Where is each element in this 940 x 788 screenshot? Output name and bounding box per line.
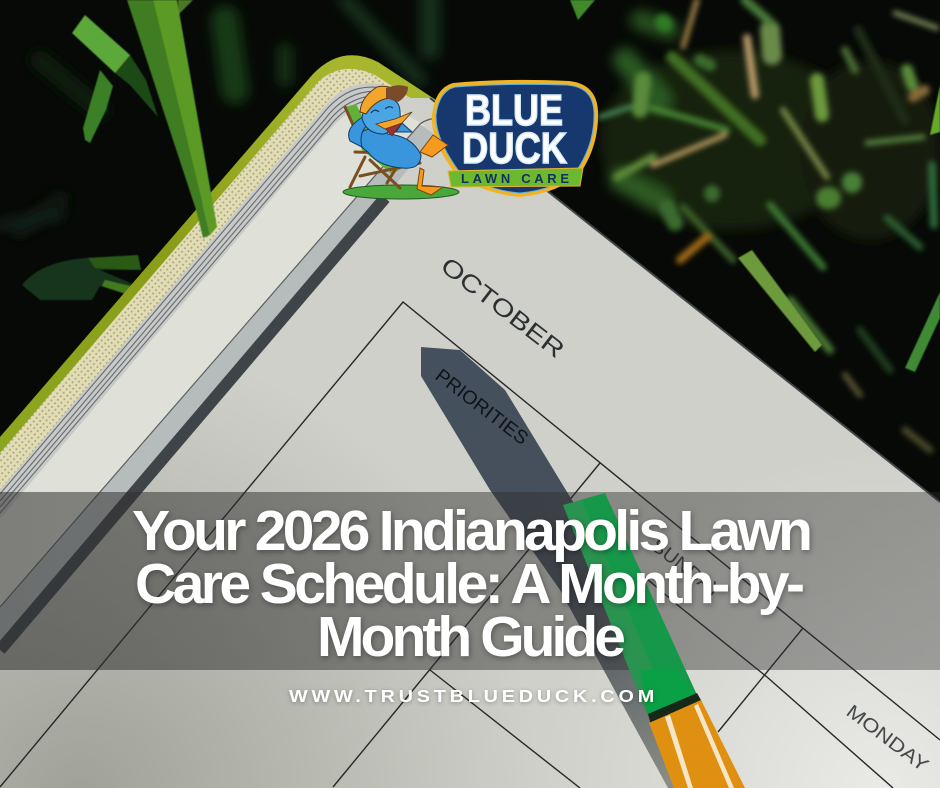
logo: badge: LAWN CARE [461, 171, 569, 186]
grass blades: foreground right [570, 0, 940, 372]
label: PRIORITIES: PRIORITIES [431, 365, 532, 450]
foreground grass blade over notebook [127, 0, 217, 238]
title: Your 2026 Indianapolis Lawn [132, 499, 813, 563]
notebook: cream dotted endpaper [0, 69, 436, 620]
website url: WWW.TRUSTBLUEDUCK.COM [289, 687, 654, 707]
logo: badge: BLUE [465, 86, 563, 135]
title: Month Guide [317, 605, 626, 669]
title banner [0, 492, 940, 670]
logo: badge [432, 80, 598, 197]
label: SUNDAY: SUNDAY [647, 535, 727, 603]
grass blades: foreground left [22, 0, 193, 300]
logo: badge: DUCK [462, 124, 567, 173]
planner grid lines [0, 302, 940, 788]
label: MONDAY: MONDAY [842, 701, 932, 777]
title [132, 499, 813, 669]
pencil [563, 493, 745, 788]
logo: duck mascot in chair [343, 85, 459, 199]
notebook: green cover edge [0, 55, 436, 620]
notebook: page stack [0, 83, 436, 640]
title: Care Schedule: A Month-by- [135, 552, 805, 616]
logo: Blue Duck Lawn Care [343, 80, 598, 199]
pencil shadow [421, 347, 705, 788]
month label: OCTOBER: OCTOBER [435, 252, 569, 364]
notebook gutter [0, 198, 385, 650]
